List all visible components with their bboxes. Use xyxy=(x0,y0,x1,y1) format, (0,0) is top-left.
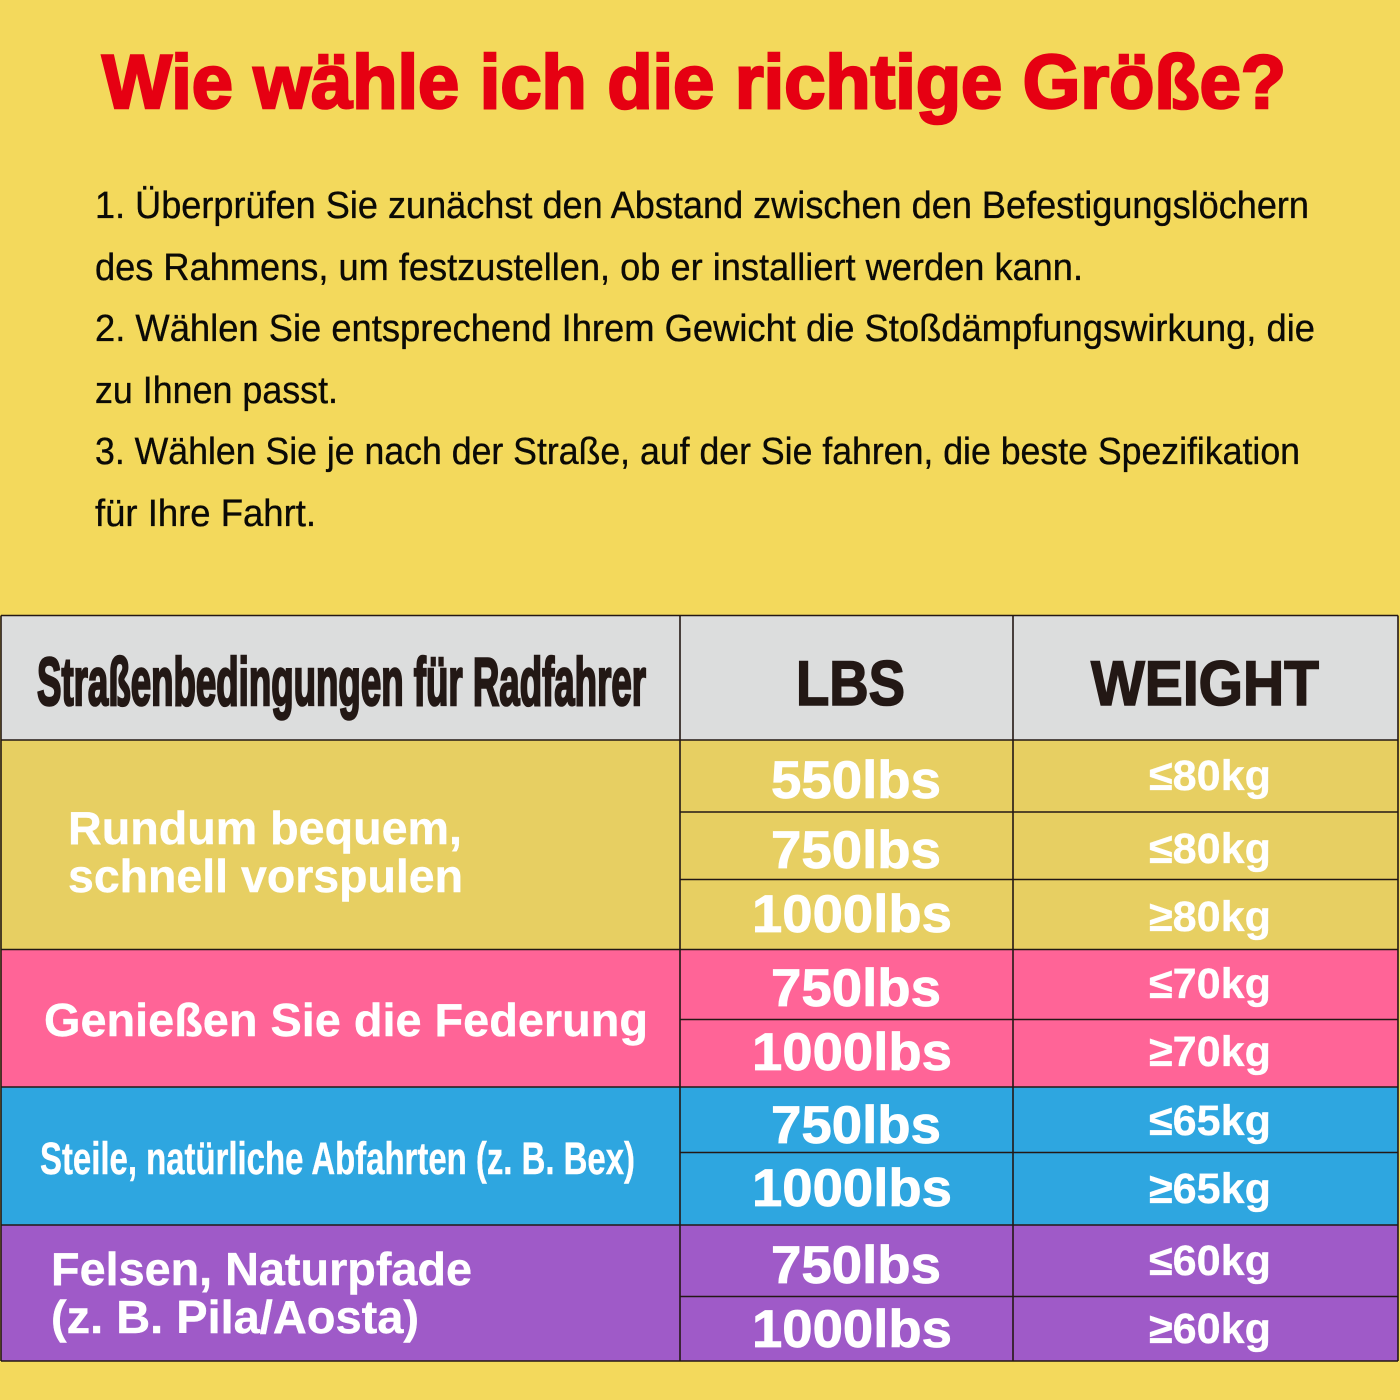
row group: Felsen, Naturpfade: ≤60kg xyxy=(1149,1237,1271,1285)
row group: Steile Abfahrten: Steile, natürliche Abfahrten (z. B. Bex) xyxy=(40,1133,635,1184)
row group: Steile Abfahrten: 750lbs xyxy=(771,1096,941,1155)
row group: Felsen, Naturpfade: 1000lbs xyxy=(752,1300,952,1359)
row group: Steile Abfahrten: ≥65kg xyxy=(1149,1165,1271,1213)
text block: instructions: zu Ihnen passt. xyxy=(95,370,338,412)
text block: instructions: 3. Wählen Sie je nach der Straße, auf der Sie fahren, die beste Spezifikation xyxy=(95,431,1300,473)
row group: Rundum bequem: ≤80kg xyxy=(1149,825,1271,873)
table grid lines xyxy=(1,616,1398,1361)
row group: Rundum bequem: ≤80kg xyxy=(1149,752,1271,800)
row group: Rundum bequem: 550lbs xyxy=(771,751,941,810)
table header row: WEIGHT xyxy=(1091,649,1319,719)
table header row: LBS xyxy=(796,649,905,719)
row group: Rundum bequem: 750lbs xyxy=(771,821,941,880)
row group: Rundum bequem: ≥80kg xyxy=(1149,893,1271,941)
row group: Steile Abfahrten: 1000lbs xyxy=(752,1159,952,1218)
text block: instructions: 1. Überprüfen Sie zunächst den Abstand zwischen den Befestigungslöchern xyxy=(95,185,1309,227)
row group: Rundum bequem: Rundum bequem, xyxy=(68,802,462,854)
text block: instructions: des Rahmens, um festzustellen, ob er installiert werden kann. xyxy=(95,247,1083,289)
text block: instructions: 2. Wählen Sie entsprechend Ihrem Gewicht die Stoßdämpfungswirkung, die xyxy=(95,308,1315,350)
row group: Genießen Sie die Federung xyxy=(1,950,1398,1087)
row group: Genießen Sie die Federung: 1000lbs xyxy=(752,1023,952,1082)
row group: Genießen Sie die Federung: Genießen Sie die Federung xyxy=(44,994,648,1046)
row group: Steile Abfahrten: ≤65kg xyxy=(1149,1097,1271,1145)
table header row xyxy=(1,616,1398,740)
row group: Felsen, Naturpfade: ≥60kg xyxy=(1149,1305,1271,1353)
row group: Felsen, Naturpfade xyxy=(1,1225,1398,1361)
text block: instructions: für Ihre Fahrt. xyxy=(95,493,316,535)
row group: Steile Abfahrten xyxy=(1,1087,1398,1225)
row group: Felsen, Naturpfade: Felsen, Naturpfade xyxy=(51,1243,472,1295)
text block: instructions xyxy=(95,185,1315,535)
row group: Felsen, Naturpfade: 750lbs xyxy=(771,1236,941,1295)
row group: Genießen Sie die Federung: ≤70kg xyxy=(1149,960,1271,1008)
size table xyxy=(1,616,1398,1361)
row group: Felsen, Naturpfade: (z. B. Pila/Aosta) xyxy=(51,1291,419,1343)
title: Wie wähle ich die richtige Größe? xyxy=(102,40,1286,125)
row group: Rundum bequem: 1000lbs xyxy=(752,885,952,944)
row group: Rundum bequem xyxy=(1,740,1398,950)
row group: Genießen Sie die Federung: 750lbs xyxy=(771,959,941,1018)
row group: Genießen Sie die Federung: ≥70kg xyxy=(1149,1028,1271,1076)
row group: Rundum bequem: schnell vorspulen xyxy=(68,850,463,902)
table header row: Straßenbedingungen für Radfahrer xyxy=(37,644,646,720)
